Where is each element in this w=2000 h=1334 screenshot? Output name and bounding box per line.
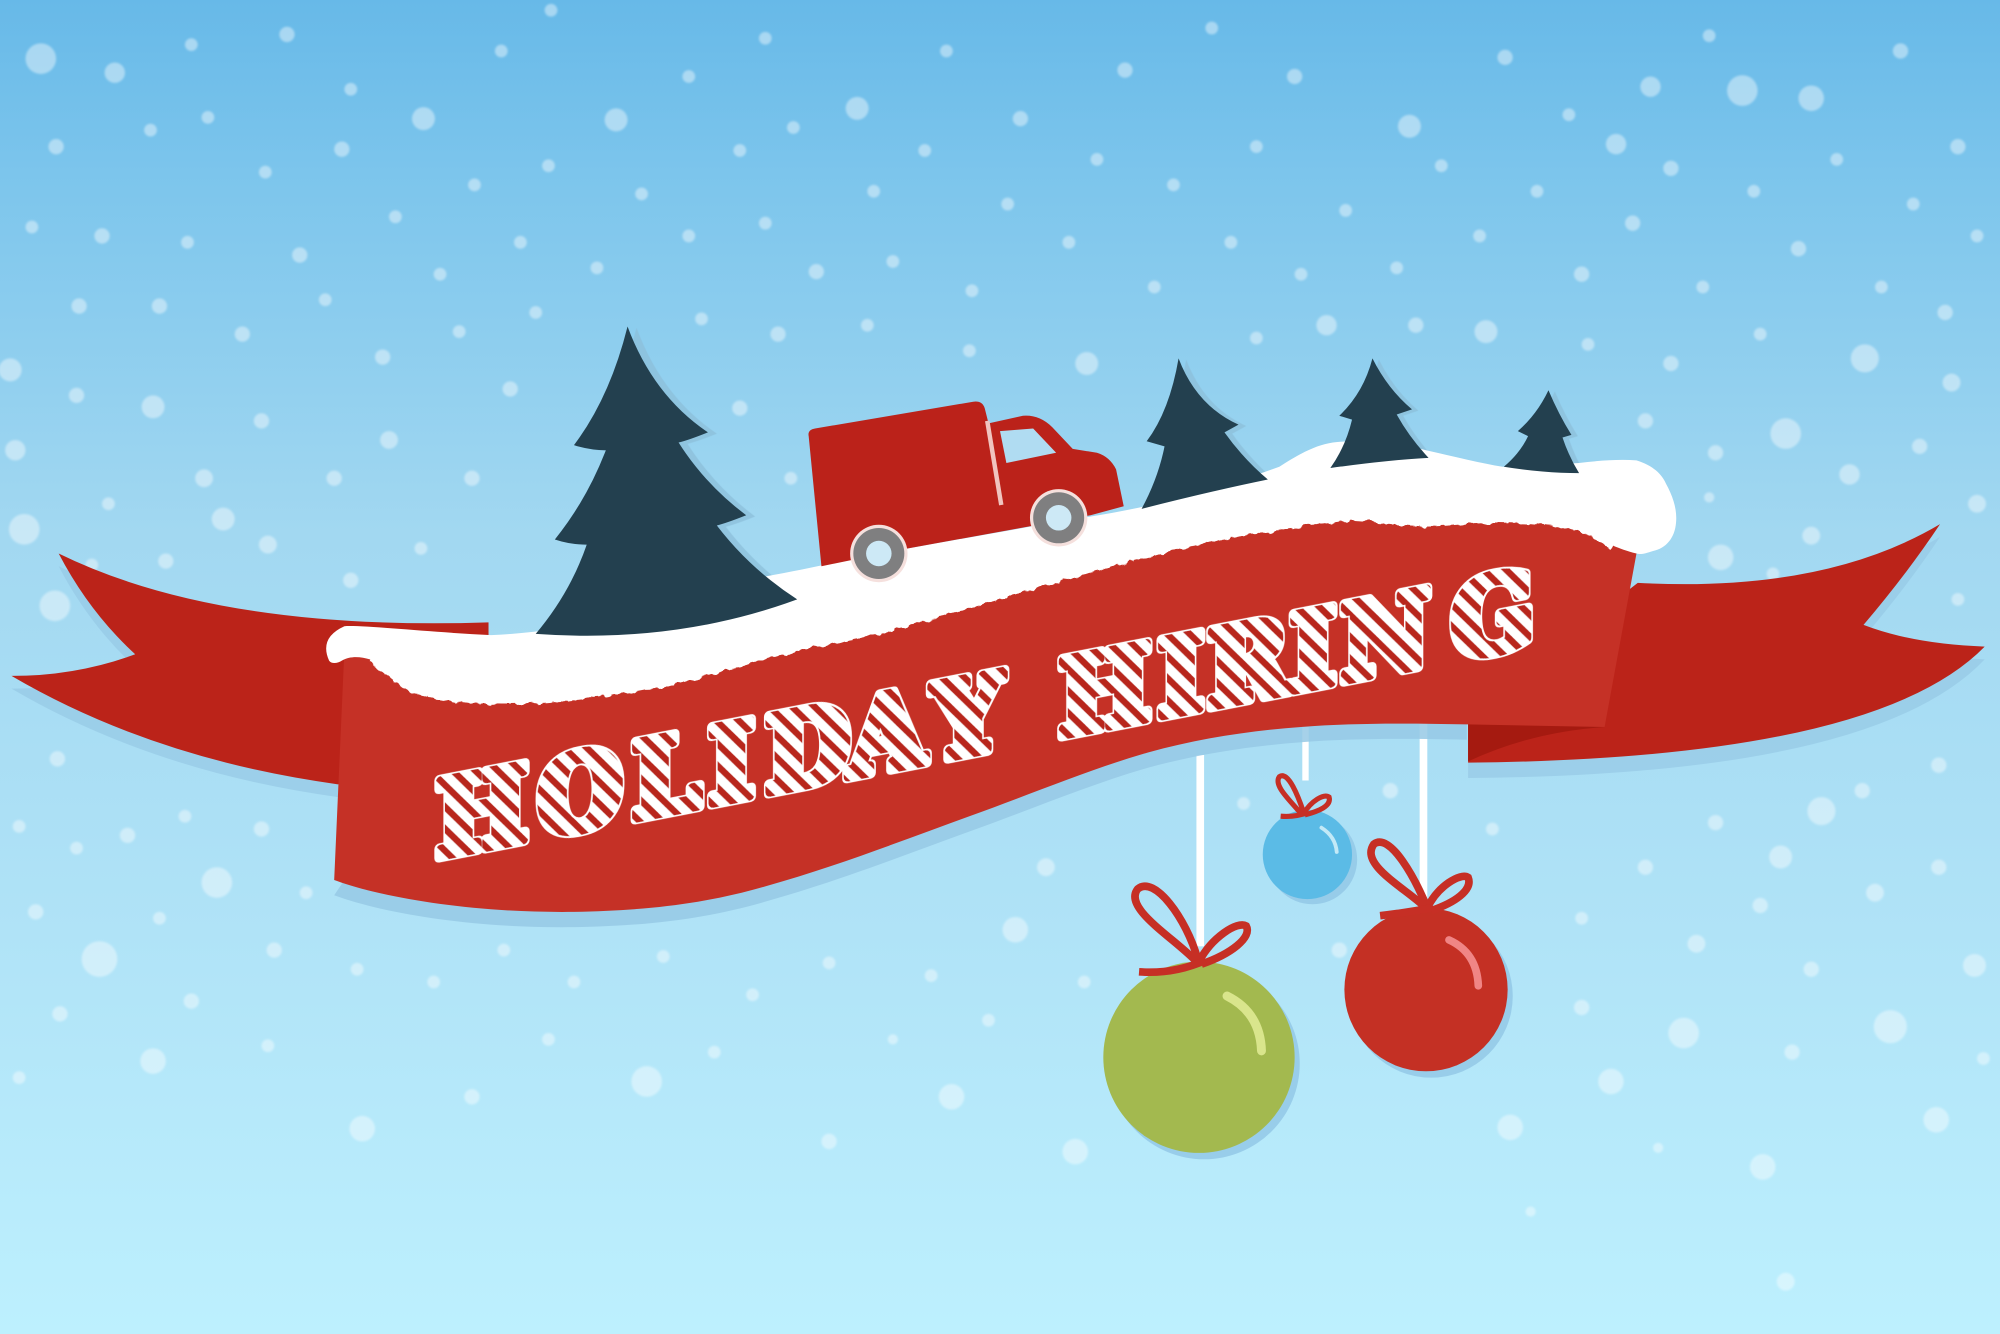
banner title: Holiday Hiring: HOLIDAY HIRING — [436, 548, 1534, 881]
cab window — [1000, 429, 1056, 463]
green ornament — [1103, 886, 1300, 1159]
pine tree 4 — [1504, 390, 1579, 473]
red ornament bow — [1371, 842, 1469, 916]
large pine tree — [536, 326, 797, 636]
tree shadows — [545, 328, 1585, 637]
blue ornament bow — [1278, 776, 1329, 816]
delivery truck — [808, 402, 1124, 582]
ribbon left tail — [11, 553, 489, 797]
green ornament bow — [1135, 886, 1247, 972]
pine tree 2 — [1142, 358, 1268, 509]
truck body — [808, 402, 1124, 566]
gap between box and cab — [987, 421, 1001, 505]
blue ornament — [1263, 776, 1357, 904]
pine tree 3 — [1330, 358, 1429, 468]
ribbon right tail — [1468, 524, 1985, 778]
snow drift on ribbon — [326, 441, 1676, 701]
red ornament — [1344, 842, 1513, 1078]
ribbon main front band — [334, 497, 1636, 927]
ornament strings — [1196, 714, 1427, 946]
rear wheel — [850, 525, 908, 582]
front wheel — [1030, 489, 1087, 546]
